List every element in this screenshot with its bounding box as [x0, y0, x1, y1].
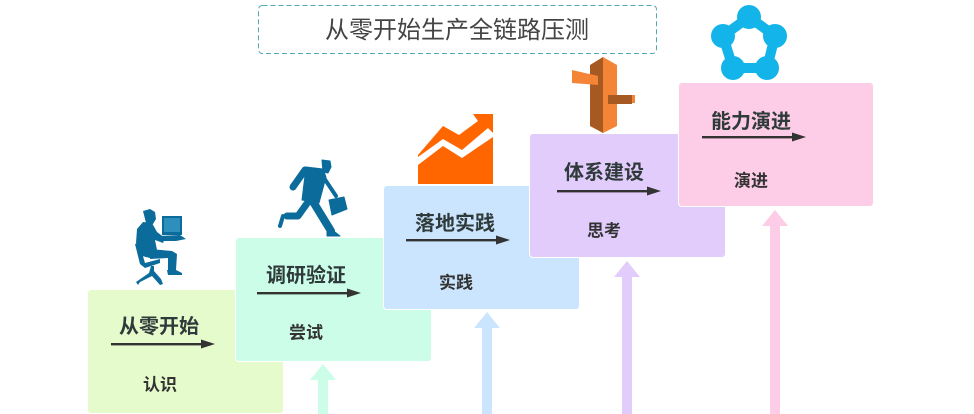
title box: 从零开始生产全链路压测 [325, 17, 589, 44]
icon: person at computer [135, 209, 186, 285]
panel: step 1 认识: 认识 [143, 376, 177, 394]
panel: step 1 认识: 从零开始 [119, 315, 199, 338]
title box [258, 6, 656, 54]
up arrow: step 4 [614, 261, 640, 414]
panel: step 5 演进 [678, 82, 874, 207]
panel: step 4 思考: 思考 [587, 222, 621, 240]
icon: orange post with arms [572, 57, 635, 133]
panel: step 3 实践: 落地实践 [415, 211, 495, 235]
up arrow: step 3 [474, 312, 500, 414]
panel: step 1 认识 [88, 290, 283, 413]
up arrow: step 5 [762, 210, 788, 414]
panel: step 5 演进: 演进 [734, 170, 768, 190]
panel: step 5 演进: 能力演进 [711, 110, 791, 133]
panel: step 3 实践 [383, 185, 580, 310]
panel: step 3 实践: 实践 [439, 272, 473, 292]
panel: step 4 思考: 体系建设 [564, 161, 644, 184]
icon: running businessman [280, 160, 347, 236]
icon: blue pentagon of circles [711, 5, 787, 80]
panel: step 2 尝试 [235, 237, 432, 362]
icon: orange trend chart [418, 114, 493, 184]
panel: step 4 思考 [529, 133, 726, 258]
panel: step 2 尝试: 调研验证 [266, 263, 346, 287]
up arrow: step 2 [310, 364, 336, 414]
panel: step 2 尝试: 尝试 [289, 324, 323, 342]
